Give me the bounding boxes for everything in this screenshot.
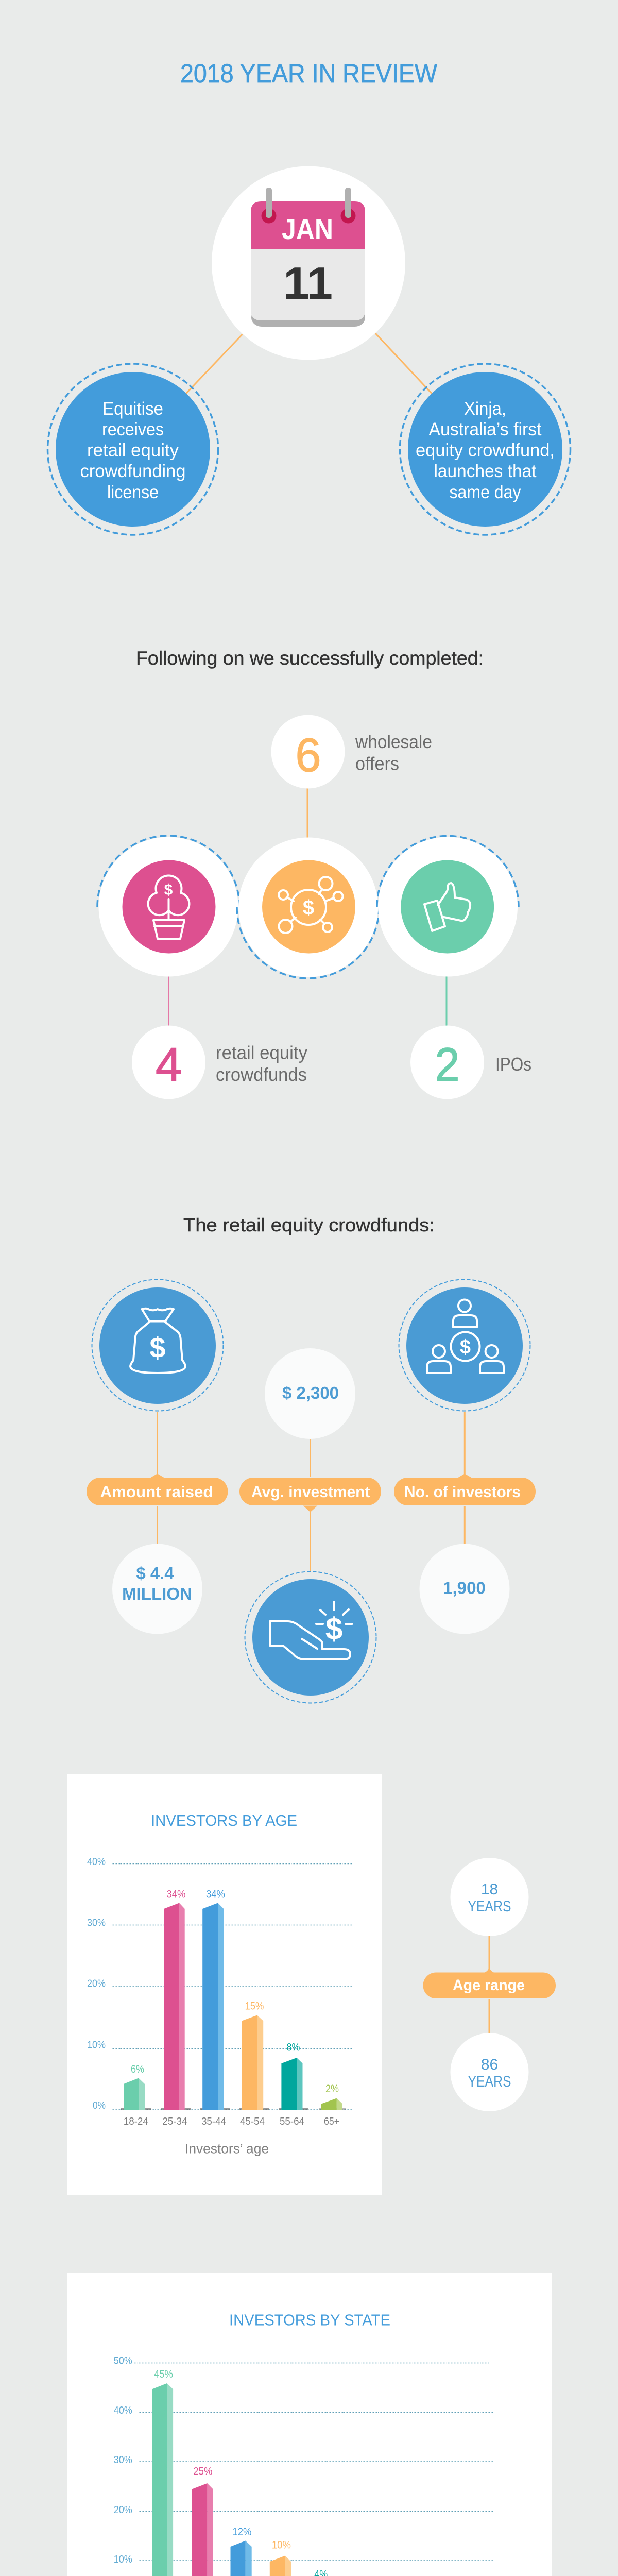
stat: 4 retail equity crowdfunds: crowdfunds — [216, 1064, 307, 1085]
heading: following on: Following on we successfully completed: — [136, 648, 484, 669]
value: 18 years: YEARS — [468, 1898, 511, 1915]
value labels: 34% — [206, 1889, 225, 1900]
stat: 2 IPOs: 2 — [435, 1039, 459, 1091]
y axis labels: 40% — [87, 1856, 106, 1868]
label pill — [87, 1478, 228, 1505]
icon: calendar JAN 11 — [212, 166, 405, 360]
chart title: INVESTORS BY AGE — [151, 1811, 297, 1829]
bars — [121, 1903, 346, 2110]
value labels: 2% — [325, 2083, 339, 2095]
stat: 2 IPOs: IPOs — [495, 1054, 531, 1075]
value: 1,900 — [419, 1544, 510, 1634]
stat: 6 wholesale offers: offers — [355, 753, 399, 774]
y axis labels: 40% — [114, 2405, 132, 2416]
panel: crowdfund stats — [87, 1280, 536, 1703]
category labels: 55-64 — [280, 2116, 304, 2127]
panel: investors by age chart — [67, 1774, 382, 2195]
callout: Xinja launch: Xinja, — [464, 399, 506, 419]
icon: retail crowdfund plant: $ — [164, 882, 173, 899]
label pill: Avg. investment — [251, 1483, 370, 1501]
axis title: Investors’ age — [185, 2141, 269, 2157]
value labels: 34% — [167, 1889, 185, 1900]
y axis labels — [114, 2355, 132, 2576]
icon: money bag — [92, 1280, 224, 1411]
icon: hand with dollar — [245, 1571, 376, 1703]
stat: 2 IPOs — [410, 1025, 531, 1099]
icon: investors group: $ — [460, 1336, 471, 1358]
y axis labels: 0% — [93, 2100, 106, 2111]
icon: IPO thumbs up — [377, 836, 519, 977]
value: 18 years — [450, 1858, 528, 1936]
value: 86 years: 86 — [481, 2056, 498, 2073]
callout: Equitise license: Equitise — [102, 399, 163, 419]
callout: Xinja launch: launches that — [434, 461, 537, 481]
value: 18 years: 18 — [481, 1881, 498, 1898]
stat: 4 retail equity crowdfunds — [132, 1025, 307, 1099]
category labels: 25-34 — [162, 2116, 187, 2127]
category labels — [124, 2116, 339, 2127]
y axis labels: 10% — [114, 2554, 132, 2565]
connector: wholesale — [307, 788, 308, 838]
value labels: 12% — [233, 2526, 251, 2538]
value: $2,300: $ 2,300 — [282, 1383, 339, 1402]
value labels — [154, 2368, 485, 2576]
callout: Equitise license: crowdfunding — [80, 461, 185, 481]
stat: 4 retail equity crowdfunds: retail equity — [216, 1042, 307, 1063]
value: $2,300 — [265, 1348, 355, 1439]
value labels — [131, 1889, 339, 2095]
label pill — [239, 1478, 381, 1505]
label pill: Age range — [453, 1977, 525, 1994]
value: $4.4 million — [112, 1544, 202, 1634]
callout: Xinja launch: equity crowdfund, — [416, 440, 555, 461]
category labels: 65+ — [324, 2116, 339, 2127]
bars — [146, 2383, 491, 2576]
value labels: 25% — [193, 2466, 212, 2477]
panel: January 11 timeline — [47, 166, 571, 535]
value labels: 8% — [286, 2041, 300, 2054]
category labels: 45-54 — [240, 2116, 265, 2127]
icon: calendar JAN 11: 11 — [283, 258, 333, 309]
y axis labels: 30% — [87, 1918, 106, 1929]
panel: completed offers — [97, 715, 531, 1099]
callout: Xinja launch: Australia’s first — [428, 419, 542, 439]
column: average investment — [239, 1348, 381, 1703]
column: number of investors — [394, 1280, 536, 1634]
label pill: No. of investors — [404, 1483, 521, 1501]
icon: hand with dollar: $ — [325, 1612, 342, 1646]
icon: wholesale network: $ — [303, 896, 314, 919]
value: 1,900: 1,900 — [443, 1579, 486, 1597]
callout: Equitise license: retail equity — [87, 440, 179, 461]
value labels: 45% — [154, 2368, 173, 2380]
stat: 6 wholesale offers: 6 — [296, 729, 321, 782]
icon: investors group — [399, 1280, 530, 1411]
title: 2018 YEAR IN REVIEW — [180, 59, 437, 88]
value: 86 years: YEARS — [468, 2073, 511, 2090]
connector: calendar to Equitise — [185, 334, 242, 394]
value labels: 6% — [131, 2063, 144, 2075]
y axis labels: 10% — [87, 2039, 106, 2050]
chart title: INVESTORS BY STATE — [229, 2311, 390, 2329]
y axis labels: 30% — [114, 2454, 132, 2466]
label pill — [423, 1967, 556, 1998]
icon: retail crowdfund plant — [97, 836, 239, 977]
y axis labels: 50% — [114, 2355, 132, 2367]
stat: 6 wholesale offers — [271, 715, 432, 788]
callout: Equitise license: license — [107, 482, 159, 502]
stat: 4 retail equity crowdfunds: 4 — [156, 1039, 182, 1091]
column: amount raised — [87, 1280, 228, 1634]
value: $4.4 million: MILLION — [122, 1584, 192, 1603]
value labels: 10% — [272, 2539, 291, 2551]
category labels: 35-44 — [201, 2116, 226, 2127]
y axis labels: 20% — [114, 2504, 132, 2516]
y axis labels: 20% — [87, 1978, 106, 1990]
icon: wholesale network — [237, 838, 379, 978]
icon: calendar JAN 11: JAN — [282, 213, 333, 246]
panel: age range — [423, 1858, 556, 2111]
heading: retail equity crowdfunds: The retail equity crowdfunds: — [183, 1214, 435, 1235]
label pill: Amount raised — [100, 1483, 213, 1501]
y axis labels — [87, 1856, 106, 2111]
connector: retail — [168, 976, 169, 1026]
connector: calendar to Xinja — [375, 333, 433, 394]
icon: money bag: $ — [149, 1331, 166, 1364]
callout: Equitise license — [47, 364, 218, 535]
category labels: 18-24 — [124, 2116, 148, 2127]
stat: 6 wholesale offers: wholesale — [355, 731, 432, 752]
value labels: 15% — [245, 2000, 264, 2012]
callout: Equitise license: receives — [102, 419, 164, 439]
value: $4.4 million: $ 4.4 — [136, 1564, 174, 1583]
label pill — [394, 1478, 536, 1505]
panel: investors by state chart — [67, 2273, 552, 2576]
value: 86 years — [450, 2033, 528, 2111]
callout: Xinja launch — [400, 364, 571, 535]
connector: IPOs — [446, 976, 447, 1026]
callout: Xinja launch: same day — [449, 482, 521, 502]
